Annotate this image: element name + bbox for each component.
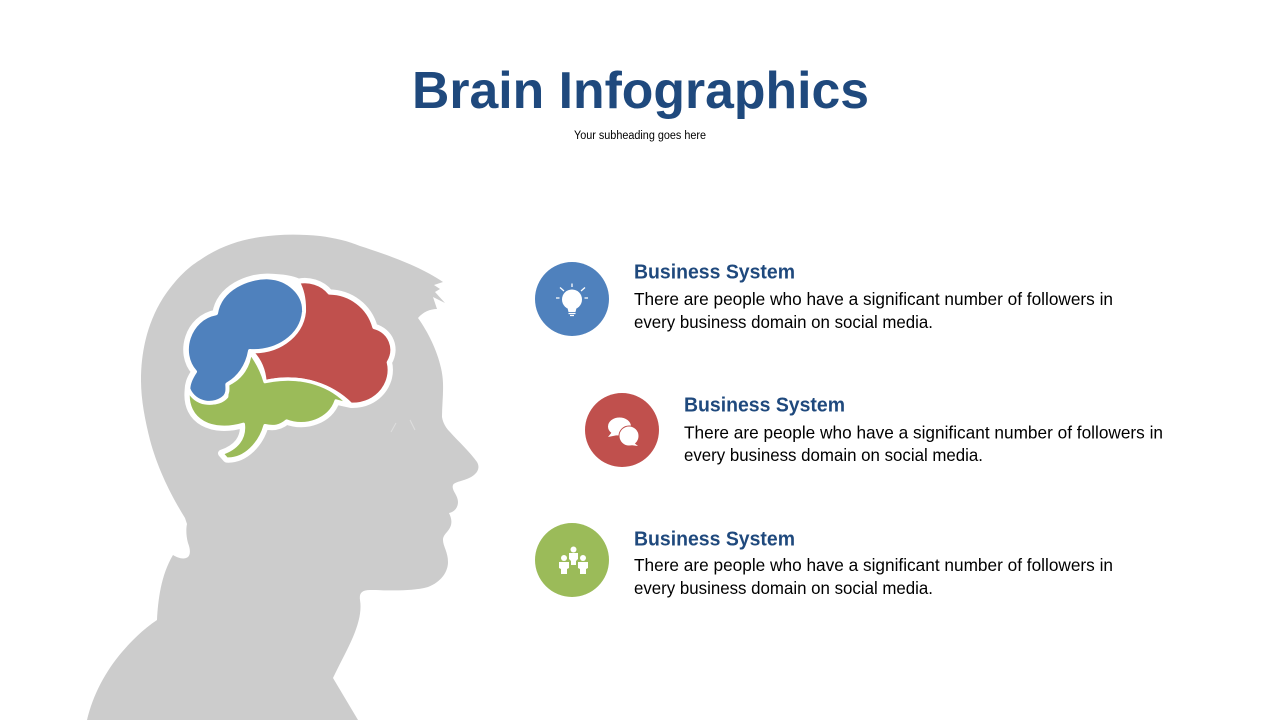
- brain lobe: blue: [187, 277, 304, 403]
- skin highlight marks: [391, 420, 415, 432]
- brain lobe: green: [188, 352, 348, 459]
- subheading: Your subheading goes here: [574, 130, 706, 142]
- row 1: body text: [634, 289, 1113, 332]
- brain lobe: red: [252, 282, 392, 404]
- title: Brain Infographics: [412, 62, 869, 120]
- brain white outline: [187, 277, 392, 459]
- brain: [187, 277, 392, 459]
- row 2: body text: every business domain on social media.: [684, 445, 983, 465]
- row 3: icon circle with people: [535, 523, 609, 597]
- row 3: body text: There are people who have a significant number of followers in: [634, 555, 1113, 575]
- row 3: heading: Business System: [634, 528, 795, 550]
- row 2: heading: Business System: [684, 394, 845, 416]
- row 1: body text: every business domain on social media.: [634, 312, 933, 332]
- row 1: icon circle with light bulb: [535, 262, 609, 336]
- row 2: body text: [684, 422, 1163, 465]
- row 3: body text: every business domain on social media.: [634, 578, 933, 598]
- row 3: body text: [634, 555, 1113, 598]
- head silhouette: [87, 235, 478, 720]
- row 2: body text: There are people who have a significant number of followers in: [684, 422, 1163, 442]
- row 2: icon circle with speech bubbles: [585, 393, 659, 467]
- row 1: body text: There are people who have a significant number of followers in: [634, 289, 1113, 309]
- row 1: heading: Business System: [634, 262, 795, 284]
